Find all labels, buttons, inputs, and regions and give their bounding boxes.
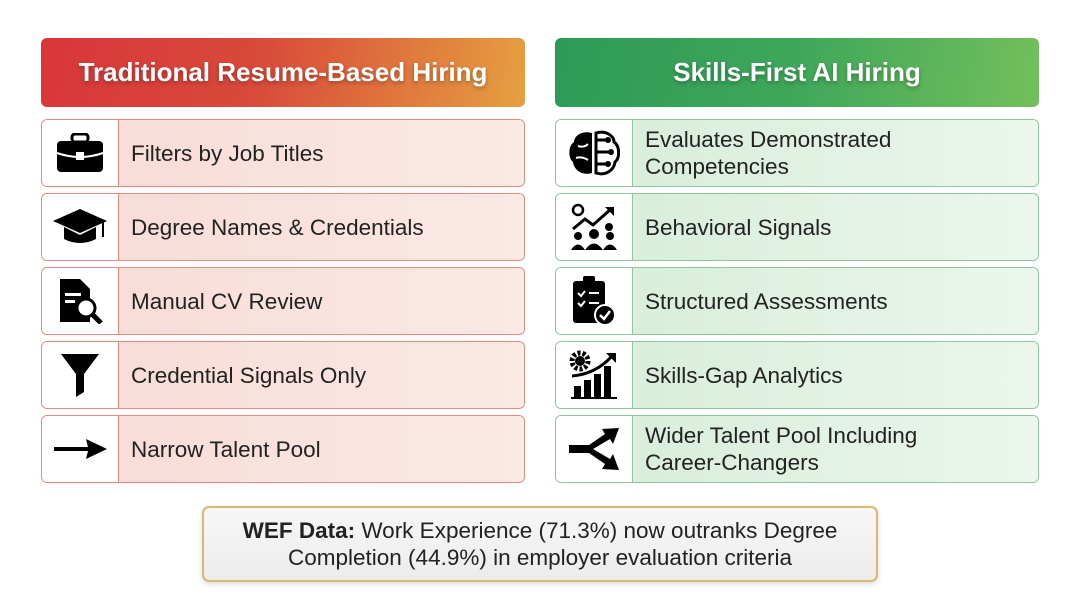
row: competencies — [555, 119, 1039, 187]
callout: WEF data: WEF Data: Work Experience (71.3%) now outranks Degree — [243, 518, 837, 543]
header: skills-first: Skills-First AI Hiring — [673, 57, 921, 87]
callout: WEF data — [202, 506, 878, 582]
row: wider pool: Wider Talent Pool Including — [645, 423, 917, 448]
row: competencies: Competencies — [645, 154, 789, 179]
header: traditional: Traditional Resume-Based Hiring — [79, 57, 487, 87]
header: traditional — [41, 38, 525, 107]
header: skills-first — [555, 38, 1039, 107]
row: job titles: Filters by Job Titles — [131, 140, 324, 166]
row: skills gap — [555, 341, 1039, 409]
row: behavioral: Behavioral Signals — [645, 214, 831, 240]
row: behavioral — [555, 193, 1039, 261]
row: narrow pool: Narrow Talent Pool — [131, 436, 321, 462]
row: credential signals — [41, 341, 525, 409]
row: job titles — [41, 119, 525, 187]
row: degrees: Degree Names & Credentials — [131, 214, 424, 240]
row: competencies: Evaluates Demonstrated — [645, 127, 891, 152]
row: wider pool: Career-Changers — [645, 450, 819, 475]
row: structured assessments — [555, 267, 1039, 335]
callout: WEF data: Completion (44.9%) in employer evaluation criteria — [288, 545, 792, 570]
row: manual cv: Manual CV Review — [131, 288, 322, 314]
row: skills gap: Skills-Gap Analytics — [645, 362, 843, 388]
row: narrow pool — [41, 415, 525, 483]
row: degrees — [41, 193, 525, 261]
row: wider pool — [555, 415, 1039, 483]
row: structured assessments: Structured Assessments — [645, 288, 888, 314]
row: credential signals: Credential Signals Only — [131, 362, 366, 388]
row: manual cv — [41, 267, 525, 335]
